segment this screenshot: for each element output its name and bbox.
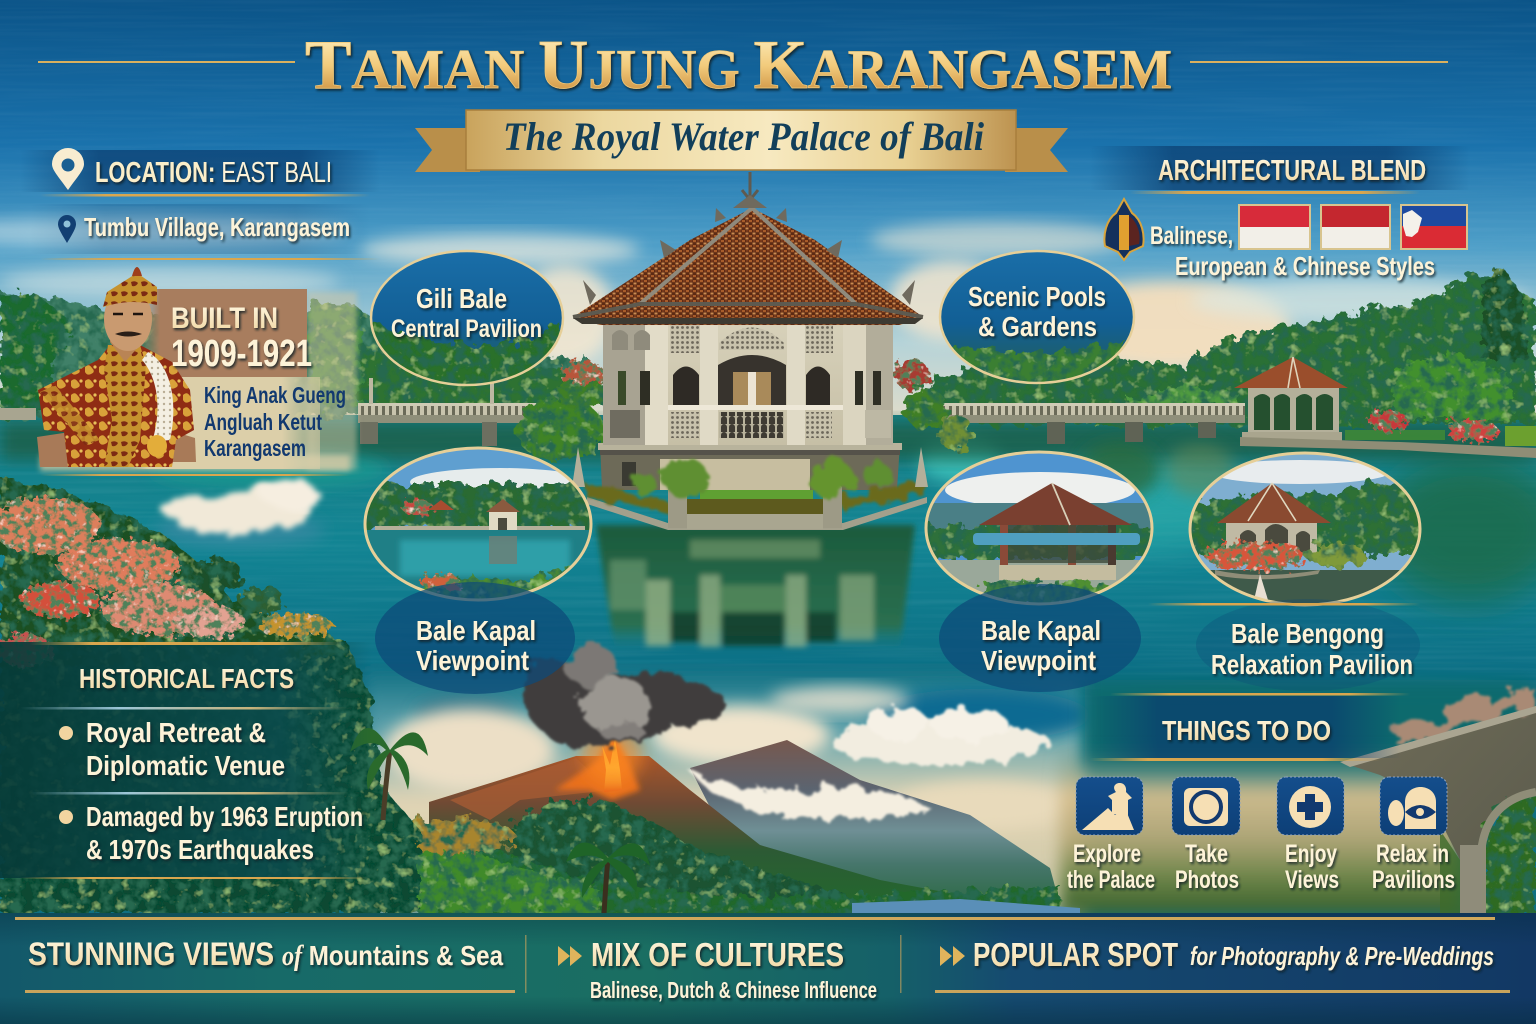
icon: take photos xyxy=(1172,777,1240,835)
take photos label: Photos xyxy=(1175,866,1239,894)
icon: relax in pavilions xyxy=(1380,777,1447,835)
label: Bale Kapal Viewpoint right: Bale Kapal xyxy=(981,615,1101,646)
right sandy haze xyxy=(1060,680,1536,915)
Balinese label: Balinese, xyxy=(1150,222,1233,250)
bubble: Gili Bale: Gili Bale xyxy=(416,283,507,314)
left stone bridge xyxy=(0,378,570,446)
mix of cultures: MIX OF CULTURES xyxy=(591,936,844,973)
palace shrubs xyxy=(632,457,890,498)
jungle foreground xyxy=(360,818,1080,916)
heading: HISTORICAL FACTS xyxy=(79,663,294,694)
lower sky, clouds and sea xyxy=(365,668,1090,913)
king name: Angluah Ketut xyxy=(204,409,322,435)
bubble: Gili Bale: Central Pavilion xyxy=(391,315,542,343)
palace island hedges and walls xyxy=(572,447,928,530)
subtitle ribbon banner: The Royal Water Palace of Bali xyxy=(503,114,984,159)
left forest xyxy=(0,640,420,915)
stunning views xyxy=(28,936,503,972)
built in heading: BUILT IN xyxy=(171,302,278,335)
explore label: Explore xyxy=(1073,840,1141,868)
background: lake water xyxy=(0,415,1536,705)
background: tree lines xyxy=(0,270,1536,425)
label: Bale Kapal Viewpoint left xyxy=(375,582,575,694)
heading: THINGS TO DO xyxy=(1162,715,1331,746)
relax label xyxy=(1372,840,1455,894)
location label: LOCATION: EAST BALI xyxy=(95,157,332,189)
panel: historical facts xyxy=(0,642,372,879)
fact two: & 1970s Earthquakes xyxy=(86,834,314,865)
bubble: Scenic Pools: & Gardens xyxy=(978,311,1097,342)
flag three xyxy=(1401,205,1467,249)
relax label: Pavilions xyxy=(1372,866,1455,894)
flag one xyxy=(1239,205,1310,249)
background: sky xyxy=(0,0,1536,440)
subtitle ribbon banner xyxy=(415,110,1068,172)
village label: Tumbu Village, Karangasem xyxy=(84,212,350,242)
palm tree left xyxy=(350,728,428,820)
fact one xyxy=(59,717,285,781)
fact one: Diplomatic Venue xyxy=(86,750,285,781)
arrows: popular spot xyxy=(940,946,965,966)
panel: built in xyxy=(37,267,357,476)
take photos label: Take xyxy=(1185,840,1228,868)
label: Bale Kapal Viewpoint left: Viewpoint xyxy=(416,645,529,676)
architectural blend xyxy=(1090,146,1470,281)
take photos label xyxy=(1175,840,1239,894)
popular spot: POPULAR SPOT xyxy=(973,936,1178,973)
right stone bridge xyxy=(925,403,1245,444)
king name xyxy=(204,382,346,461)
palm tree centre xyxy=(566,842,650,914)
flowering bush xyxy=(0,477,345,670)
enjoy views label xyxy=(1285,840,1339,894)
icon: location pin xyxy=(52,148,84,190)
tiled roof xyxy=(573,172,923,325)
fact one: Royal Retreat & xyxy=(86,717,266,748)
icon: enjoy views xyxy=(1277,777,1344,835)
fact two xyxy=(59,801,363,865)
palace walls xyxy=(603,312,893,445)
explore label xyxy=(1067,840,1155,894)
heading: ARCHITECTURAL BLEND xyxy=(1158,155,1426,187)
enjoy views label: Views xyxy=(1285,866,1339,894)
panel: things to do xyxy=(1067,693,1455,894)
enjoy views label: Enjoy xyxy=(1285,840,1337,868)
label: Bale Kapal Viewpoint right xyxy=(939,584,1141,692)
label: Bale Bengong: Bale Bengong xyxy=(1231,618,1384,649)
fact two: Damaged by 1963 Eruption xyxy=(86,801,363,832)
bubble: Scenic Pools xyxy=(940,251,1134,390)
stone bridge with carved arch xyxy=(1340,688,1536,915)
photo: garden pool viewpoint xyxy=(360,445,600,605)
popular spot xyxy=(973,936,1494,973)
photo: Bale Bengong pavilion xyxy=(1185,450,1425,610)
far shore with red flowers xyxy=(1240,410,1536,458)
icon: Balinese emblem xyxy=(1104,199,1144,260)
small pavilion on far shore xyxy=(1234,357,1348,441)
location block xyxy=(20,148,380,260)
king name: Karangasem xyxy=(204,435,306,461)
arrows: mix of cultures xyxy=(558,946,582,966)
king portrait xyxy=(37,267,196,467)
volcano with lava and smoke xyxy=(429,643,960,915)
bubble: Scenic Pools: Scenic Pools xyxy=(968,281,1106,312)
relax label: Relax in xyxy=(1376,840,1449,868)
shrubs beside palace xyxy=(516,360,973,462)
label: Bale Bengong: Relaxation Pavilion xyxy=(1211,649,1413,680)
label: Bale Kapal Viewpoint right: Viewpoint xyxy=(981,645,1096,676)
flag two xyxy=(1321,205,1390,249)
king name: King Anak Gueng xyxy=(204,382,346,408)
title: TAMAN UJUNG KARANGASEM xyxy=(305,27,1172,104)
label: Bale Bengong xyxy=(1148,599,1420,691)
stunning views: of Mountains & Sea xyxy=(282,940,503,972)
styles label: European & Chinese Styles xyxy=(1175,251,1435,281)
mix of cultures: Balinese, Dutch & Chinese Influence xyxy=(590,977,877,1003)
mix of cultures xyxy=(590,936,877,1003)
explore label: the Palace xyxy=(1067,866,1155,894)
icon: small pin xyxy=(58,215,76,243)
palace base xyxy=(598,443,902,490)
label: Bale Kapal Viewpoint left: Bale Kapal xyxy=(416,615,536,646)
palace reflection xyxy=(596,525,915,650)
central palace: Gili Bale pavilion xyxy=(572,172,928,530)
bottom banner xyxy=(0,913,1536,1024)
icon: explore xyxy=(1076,777,1143,835)
distant mountain xyxy=(690,740,1060,905)
built in years: 1909-1921 xyxy=(171,333,312,375)
bubble: Gili Bale xyxy=(371,251,563,390)
stunning views: STUNNING VIEWS xyxy=(28,936,274,972)
photo: Bale Kapal pavilion xyxy=(925,450,1155,610)
